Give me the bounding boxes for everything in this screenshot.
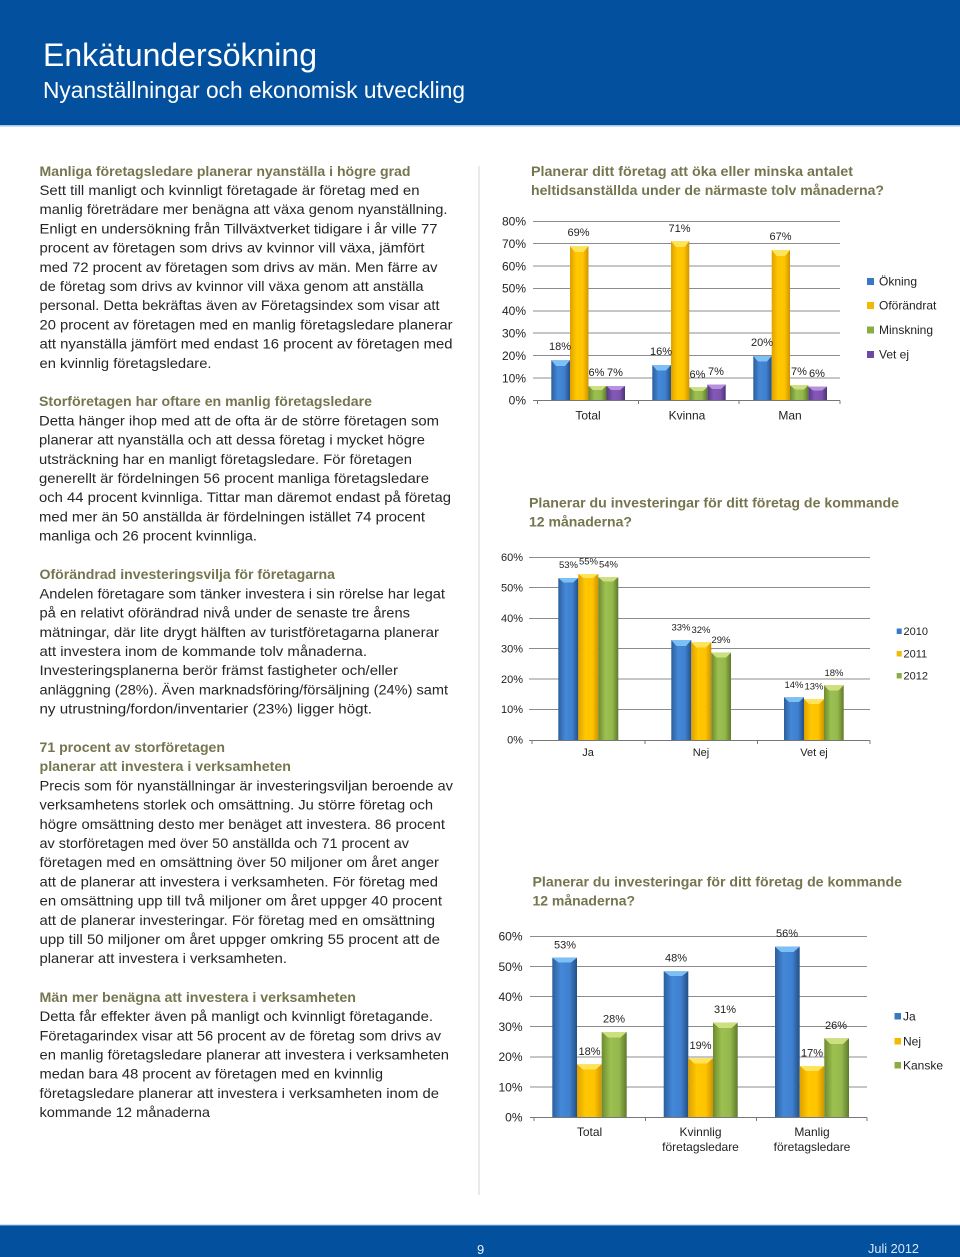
category labels: Nej bbox=[693, 747, 709, 759]
y axis labels: 60% bbox=[501, 552, 523, 564]
text block: Oförändrad investeringsvilja: Andelen företagare som tänker investera i sin rörelse har legat bbox=[40, 586, 445, 602]
data labels: 14% bbox=[784, 680, 804, 691]
y axis labels: 20% bbox=[498, 1050, 523, 1064]
y axis labels bbox=[501, 552, 523, 746]
category labels: Total bbox=[575, 408, 601, 422]
legend: Ja bbox=[903, 1010, 916, 1024]
data labels: 48% bbox=[665, 952, 687, 964]
category labels: Vet ej bbox=[800, 747, 828, 759]
category labels: företagsledare bbox=[774, 1140, 851, 1154]
text block: Storföretagen: och 44 procent kvinnliga. Tittar man däremot endast på företag bbox=[39, 489, 451, 505]
text block: Storföretagen: planerar att nyanställa och att dessa företag i mycket högre bbox=[39, 432, 425, 448]
data labels: 29% bbox=[711, 635, 731, 646]
y axis labels: 10% bbox=[498, 1080, 523, 1094]
text block: Storföretagen: Detta hänger ihop med att de ofta är de större företagen som bbox=[39, 412, 439, 428]
legend: Minskning bbox=[879, 323, 933, 337]
category labels: Ja bbox=[582, 747, 595, 759]
text block: Män mer benägna: medan bara 48 procent av företagen med en kvinnlig bbox=[40, 1066, 383, 1082]
data labels: 18% bbox=[824, 668, 844, 679]
y axis labels: 0% bbox=[509, 394, 526, 408]
data labels: 28% bbox=[603, 1014, 625, 1026]
bars: Total bbox=[552, 958, 627, 1117]
data labels: 31% bbox=[714, 1004, 736, 1016]
data labels: 33% bbox=[671, 622, 691, 634]
bars: Nej bbox=[671, 640, 731, 740]
data labels bbox=[554, 928, 847, 1060]
legend: Kanske bbox=[903, 1058, 943, 1072]
data labels: 69% bbox=[567, 227, 590, 239]
heading: Manliga företagsledare: Manliga företagsledare planerar nyanställa i högre grad bbox=[40, 163, 411, 179]
bars: Total bbox=[551, 246, 625, 400]
footer bar bbox=[0, 1224, 960, 1257]
data labels: 18% bbox=[549, 341, 571, 353]
legend: Ökning bbox=[879, 274, 917, 288]
data labels: 7% bbox=[791, 366, 807, 378]
data labels: 20% bbox=[751, 337, 773, 349]
data labels: 32% bbox=[691, 625, 711, 636]
bars: Ja bbox=[558, 574, 618, 740]
text block: Manliga företagsledare bbox=[40, 163, 453, 371]
heading: Oförändrad investeringsvilja: Oförändrad investeringsvilja för företagarna bbox=[40, 566, 335, 582]
bars: Kvinna bbox=[652, 241, 726, 400]
text block: 71 procent av storföretagen: högre omsättning desto mer benäget att investera. 86 procent bbox=[40, 816, 445, 832]
page number: 9 bbox=[477, 1242, 484, 1257]
text block: 71 procent av storföretagen: av storföretagen med över 50 anställda och 71 procent av bbox=[40, 835, 409, 851]
category labels: Kvinna bbox=[669, 408, 706, 422]
text block: Män mer benägna: en manlig företagsledare planerar att investera i verksamheten bbox=[40, 1046, 449, 1062]
category labels: företagsledare bbox=[662, 1140, 739, 1154]
text block: Oförändrad investeringsvilja bbox=[40, 566, 448, 716]
legend: Vet ej bbox=[879, 348, 909, 362]
text block: Oförändrad investeringsvilja: anläggning (28%). Även marknadsföring/försäljning (24%) samt bbox=[40, 682, 448, 698]
text block: 71 procent av storföretagen: att de planerar att investera i verksamheten. För företag med bbox=[40, 874, 438, 890]
data labels: 71% bbox=[668, 223, 691, 235]
y axis labels: 80% bbox=[502, 214, 526, 228]
y axis labels: 0% bbox=[507, 734, 523, 746]
heading: chart 2: 12 månaderna? bbox=[529, 514, 632, 530]
y axis labels: 30% bbox=[502, 326, 526, 340]
text block: Manliga företagsledare: Enligt en undersökning från Tillväxtverket tidigare i år ville 77 bbox=[40, 220, 438, 236]
data labels: 6% bbox=[809, 368, 825, 380]
text block: 71 procent av storföretagen bbox=[40, 739, 453, 966]
text block: Manliga företagsledare: procent av företagen som drivs av kvinnor vill växa, jämfört bbox=[40, 240, 425, 256]
bar chart: investments by leader gender bbox=[498, 928, 943, 1154]
data labels: 6% bbox=[589, 367, 605, 379]
heading: 71 procent av storföretagen bbox=[40, 739, 291, 774]
text block: Manliga företagsledare: att nyanställa jämfört med endast 16 procent av företagen med bbox=[40, 336, 452, 352]
text block: 71 procent av storföretagen: upp till 50 miljoner om året uppger omkring 55 procent att de bbox=[40, 931, 440, 947]
bars: Vet ej bbox=[784, 685, 844, 740]
data labels: 26% bbox=[825, 1020, 847, 1032]
category labels: Kvinnlig bbox=[679, 1125, 722, 1139]
heading: chart 1: heltidsanställda under de närmaste tolv månaderna? bbox=[531, 182, 884, 198]
text block: 71 procent av storföretagen: företagen med en omsättning över 50 miljoner om året anger bbox=[40, 854, 439, 870]
text block: 71 procent av storföretagen: planerar att investera i verksamheten. bbox=[40, 950, 287, 966]
legend: 2012 bbox=[904, 670, 928, 682]
heading: chart 2: Planerar du investeringar för ditt företag de kommande bbox=[529, 494, 899, 510]
data labels bbox=[559, 556, 844, 692]
bars: Kvinnlig företagsledare bbox=[664, 971, 738, 1117]
text block: Manliga företagsledare: de företag som drivs av kvinnor vill växa genom att anställa bbox=[40, 278, 424, 294]
y axis labels: 10% bbox=[501, 704, 523, 716]
text block: Storföretagen: generellt är fördelningen 56 procent manliga företagsledare bbox=[39, 470, 429, 486]
text block: Oförändrad investeringsvilja: på en relativt oförändrad nivå under de senaste tre årens bbox=[40, 604, 410, 620]
y axis labels: 10% bbox=[502, 372, 526, 386]
data labels: 56% bbox=[776, 928, 798, 940]
category labels: Total bbox=[577, 1125, 602, 1139]
data labels: 55% bbox=[579, 556, 599, 568]
bars: Manlig företagsledare bbox=[775, 947, 849, 1117]
text block: Män mer benägna bbox=[40, 989, 449, 1120]
text block: Manliga företagsledare: med 72 procent av företagen som drivs av män. Men färre av bbox=[40, 259, 437, 275]
data labels: 54% bbox=[599, 560, 619, 570]
y axis labels: 40% bbox=[501, 613, 523, 625]
text block: Storföretagen: utsträckning har en manligt företagsledare. För företagen bbox=[39, 451, 412, 467]
text block: Storföretagen: manliga och 26 procent kvinnliga. bbox=[39, 528, 257, 544]
text block: Oförändrad investeringsvilja: Investeringsplanerna berör främst fastigheter och/eller bbox=[40, 662, 398, 678]
heading: 71 procent av storföretagen: 71 procent av storföretagen bbox=[40, 739, 225, 755]
data labels: 7% bbox=[607, 367, 623, 379]
text block: 71 procent av storföretagen: att de planerar investeringar. För företag med en omsättning bbox=[40, 912, 435, 928]
y axis labels bbox=[502, 214, 526, 408]
heading: Storföretagen: Storföretagen har oftare en manlig företagsledare bbox=[39, 393, 372, 409]
text block: Manliga företagsledare: Sett till manligt och kvinnligt företagade är företag med en bbox=[40, 182, 420, 198]
y axis labels: 50% bbox=[498, 960, 523, 974]
y axis labels: 0% bbox=[505, 1110, 523, 1124]
y axis labels: 30% bbox=[501, 644, 523, 656]
legend bbox=[894, 1010, 943, 1072]
y axis labels: 20% bbox=[502, 349, 526, 363]
data labels: 6% bbox=[690, 369, 706, 381]
text block: Manliga företagsledare: manlig företrädare mer benägna att växa genom nyanställning. bbox=[40, 201, 448, 217]
text block: 71 procent av storföretagen: en omsättning upp till två miljoner om året uppger 40 procent bbox=[40, 892, 442, 908]
y axis labels: 30% bbox=[498, 1020, 523, 1034]
legend: 2011 bbox=[904, 648, 927, 660]
date: Juli 2012 bbox=[868, 1242, 919, 1256]
heading: Män mer benägna: Män mer benägna att investera i verksamheten bbox=[40, 989, 356, 1005]
data labels bbox=[549, 223, 825, 381]
bar chart: staff plans bbox=[502, 214, 937, 422]
y axis labels: 40% bbox=[498, 990, 523, 1004]
legend: Oförändrat bbox=[879, 298, 937, 312]
data labels: 16% bbox=[650, 346, 672, 358]
legend: 2010 bbox=[904, 626, 928, 638]
heading: chart 3 bbox=[532, 874, 902, 908]
header banner bbox=[0, 0, 960, 126]
text block: Oförändrad investeringsvilja: ny utrustning/fordon/inventarier (23%) ligger högt. bbox=[40, 700, 372, 716]
category labels bbox=[577, 1125, 851, 1154]
y axis labels: 60% bbox=[498, 930, 523, 944]
y axis labels: 50% bbox=[501, 582, 523, 594]
text block: Manliga företagsledare: en kvinnlig företagsledare. bbox=[40, 355, 212, 371]
data labels: 67% bbox=[769, 231, 792, 243]
data labels: 53% bbox=[554, 940, 576, 952]
text block: Storföretagen bbox=[39, 393, 451, 544]
text block: Män mer benägna: Företagarindex visar att 56 procent av de företag som drivs av bbox=[40, 1028, 441, 1044]
data labels: 7% bbox=[708, 366, 724, 378]
text block: 71 procent av storföretagen: Precis som för nyanställningar är investeringsviljan beroende av bbox=[40, 778, 453, 794]
category labels bbox=[582, 747, 828, 759]
heading: chart 3: Planerar du investeringar för ditt företag de kommande bbox=[532, 874, 902, 890]
subtitle: Nyanställningar och ekonomisk utveckling bbox=[43, 77, 465, 103]
legend bbox=[867, 274, 937, 362]
data labels: 13% bbox=[804, 682, 824, 692]
title: Enkätundersökning bbox=[43, 37, 317, 73]
category labels: Manlig bbox=[794, 1125, 830, 1139]
text block: Storföretagen: med mer än 50 anställda är fördelningen istället 74 procent bbox=[39, 508, 425, 524]
text block: Män mer benägna: företagsledare planerar att investera i verksamheten inom de bbox=[40, 1085, 439, 1101]
text block: Manliga företagsledare: personal. Detta bekräftas även av Företagsindex som visar att bbox=[40, 297, 440, 313]
y axis labels: 70% bbox=[502, 237, 526, 251]
data labels: 19% bbox=[689, 1040, 712, 1052]
text block: Oförändrad investeringsvilja: att investera inom de kommande tolv månaderna. bbox=[40, 643, 367, 659]
heading: chart 1: Planerar ditt företag att öka eller minska antalet bbox=[531, 163, 853, 179]
category labels: Man bbox=[778, 408, 802, 422]
y axis labels: 50% bbox=[502, 282, 526, 296]
y axis labels bbox=[498, 930, 523, 1124]
data labels: 17% bbox=[801, 1048, 823, 1060]
text block: Manliga företagsledare: 20 procent av företagen med en manlig företagsledare planerar bbox=[40, 316, 453, 332]
heading: chart 3: 12 månaderna? bbox=[532, 892, 635, 908]
text block: 71 procent av storföretagen: verksamhetens storlek och omsättning. Ju större företag och bbox=[40, 796, 433, 812]
data labels: 18% bbox=[578, 1046, 601, 1058]
heading: chart 2 bbox=[529, 494, 899, 530]
data labels: 53% bbox=[559, 560, 579, 571]
legend: Nej bbox=[903, 1034, 921, 1048]
category labels bbox=[575, 408, 802, 422]
heading: 71 procent av storföretagen: planerar att investera i verksamheten bbox=[40, 758, 291, 774]
y axis labels: 60% bbox=[502, 260, 526, 274]
text block: Oförändrad investeringsvilja: mätningar, där lite drygt hälften av turistföretagarna planerar bbox=[40, 624, 439, 640]
text block: Män mer benägna: kommande 12 månaderna bbox=[40, 1104, 210, 1120]
y axis labels: 20% bbox=[501, 674, 523, 686]
bars: Man bbox=[753, 250, 827, 400]
heading: chart 1 bbox=[531, 163, 884, 198]
bar chart: investments by year bbox=[501, 552, 928, 759]
legend bbox=[897, 626, 928, 682]
text block: Män mer benägna: Detta får effekter även på manligt och kvinnligt företagande. bbox=[40, 1008, 433, 1024]
y axis labels: 40% bbox=[502, 304, 526, 318]
